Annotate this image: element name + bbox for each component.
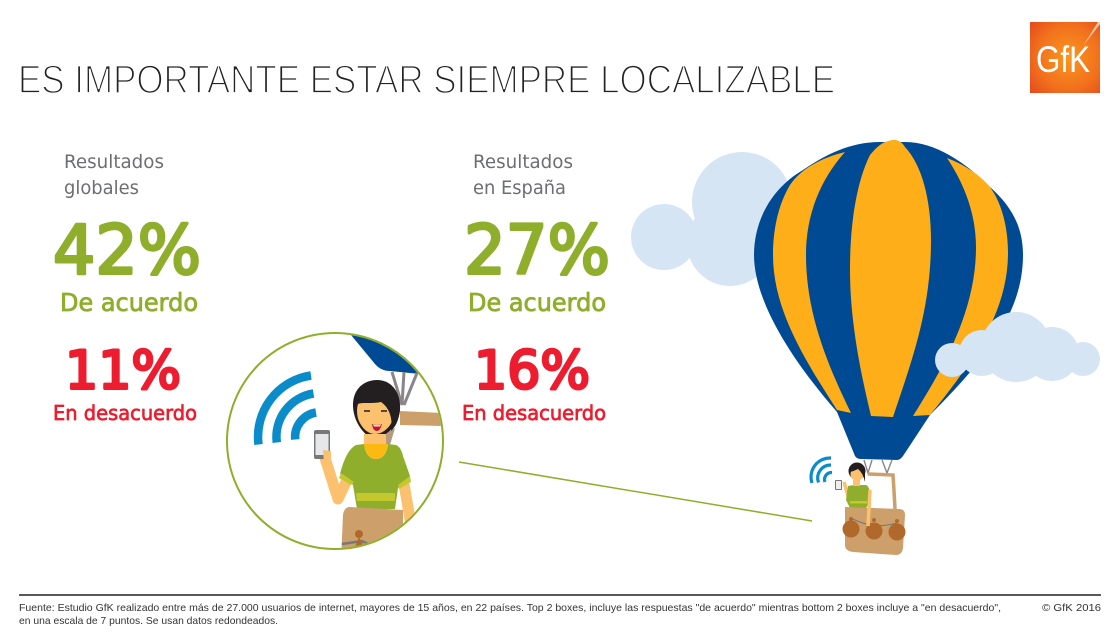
- cloud in front of balloon: [935, 312, 1100, 382]
- phone: [314, 430, 330, 459]
- panel: Spain results: [462, 151, 610, 425]
- connector line: [459, 462, 812, 521]
- stat: 11% disagree: 11%: [65, 340, 181, 402]
- label: disagree: En desacuerdo: [53, 401, 197, 425]
- shirt: [340, 444, 410, 509]
- stat: 42% agree: 42%: [53, 212, 201, 290]
- heading: Spain results: Resultados: [473, 151, 573, 173]
- heading: Spain results: [473, 151, 573, 199]
- label: disagree: En desacuerdo: [462, 401, 606, 425]
- footer: [19, 595, 1101, 627]
- panel: global results: [53, 151, 201, 425]
- icon: wifi signal: [258, 376, 316, 444]
- hair back: [353, 380, 400, 436]
- hot air balloon: [754, 140, 1023, 460]
- copyright: © GfK 2016: [1042, 602, 1101, 614]
- balloon gondola with passenger: [811, 458, 906, 555]
- icon: small wifi signal: [811, 458, 832, 483]
- fringe: [356, 400, 400, 431]
- heading: global results: globales: [64, 177, 139, 199]
- source note: Fuente: Estudio GfK realizado entre más de 27.000 usuarios de internet, mayores de 15 años, en 22 países. Top 2 boxes, incluye las respuestas "de acuerdo" mientras bottom 2 boxes incluye a "en desacuerdo",: [19, 602, 1001, 614]
- neck: [364, 434, 386, 448]
- stat: 16% disagree: 16%: [474, 340, 590, 402]
- source note: en una escala de 7 puntos. Se usan datos redondeados.: [19, 615, 278, 627]
- balloon corner: [351, 335, 418, 374]
- label: agree: De acuerdo: [60, 288, 198, 317]
- face: [356, 402, 394, 434]
- basket: [342, 507, 403, 548]
- heading: Spain results: en España: [473, 177, 566, 199]
- heading: global results: Resultados: [64, 151, 164, 173]
- title: ES IMPORTANTE ESTAR SIEMPRE LOCALIZABLE: [18, 58, 835, 102]
- source note: [19, 602, 1001, 627]
- arms: [325, 458, 347, 499]
- label: agree: De acuerdo: [468, 288, 606, 317]
- GfK logo: [1030, 22, 1100, 93]
- heading: global results: [64, 151, 164, 199]
- GfK logo: GfK: [1036, 39, 1090, 80]
- cloud behind balloon: [631, 152, 792, 286]
- magnified passenger circle: [227, 330, 443, 560]
- stat: 27% agree: 27%: [464, 212, 610, 290]
- basket frame: [400, 411, 443, 426]
